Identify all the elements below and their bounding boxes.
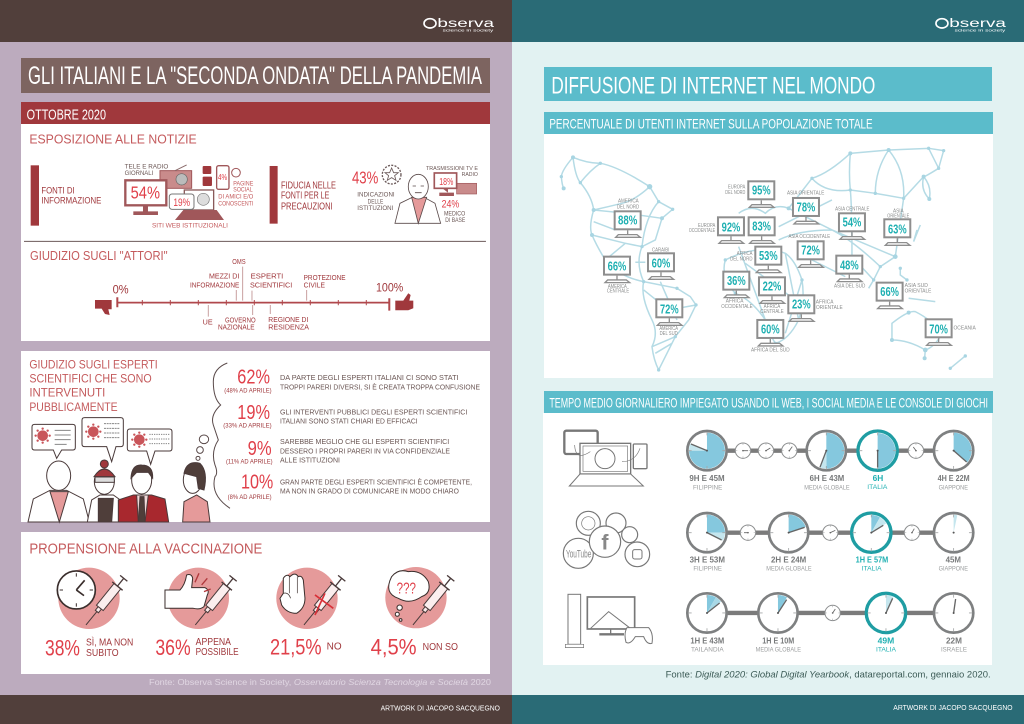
map region labels: AMERICA bbox=[618, 199, 639, 205]
marker bar 1 bbox=[31, 165, 39, 226]
labels: tele radio: TELE E RADIO bbox=[125, 163, 168, 170]
actor labels: CIVILE bbox=[304, 280, 325, 289]
marker bar 2 bbox=[270, 166, 278, 224]
small clocks bbox=[735, 443, 924, 458]
labels row 3: 1H E 10M bbox=[762, 637, 795, 646]
clock: 4h22 giappone bbox=[934, 431, 973, 470]
section: time panel bbox=[549, 395, 1013, 712]
timeline row 1 bbox=[687, 431, 973, 470]
labels row 2: MEDIA GLOBALE bbox=[766, 566, 812, 573]
icon: game console bbox=[565, 594, 652, 648]
heading: esposizione: ESPOSIZIONE ALLE NOTIZIE bbox=[29, 131, 197, 146]
stat: 9%: (11% AD APRILE) bbox=[226, 458, 273, 465]
world map network bbox=[561, 148, 965, 370]
map region labels: ORIENTALE bbox=[816, 305, 843, 311]
map region labels: CENTRALE bbox=[760, 309, 784, 315]
stat: 10%: 10% bbox=[241, 470, 273, 493]
map region labels bbox=[607, 185, 976, 353]
monitor: africa orientale: 23% bbox=[792, 298, 811, 312]
icon: tv 18% bbox=[434, 173, 477, 196]
stat: 4,5%: 4,5% bbox=[371, 634, 417, 659]
labels row 3: 49M bbox=[878, 637, 895, 646]
actor labels bbox=[190, 257, 346, 331]
labels: tele radio: GIORNALI bbox=[125, 170, 153, 177]
actor labels: SCIENTIFICI bbox=[250, 280, 292, 289]
label: istituzioni: DELLE bbox=[368, 198, 383, 205]
section: lower left panels bbox=[28, 357, 500, 712]
heading: esperti: SCIENTIFICI CHE SONO bbox=[29, 372, 152, 386]
labels: pagine social: SOCIAL bbox=[233, 187, 253, 194]
actor labels: MEZZI DI bbox=[209, 272, 239, 281]
stat: 10%: MA NON IN GRADO DI COMUNICARE IN MODO CHIARO bbox=[280, 486, 459, 495]
map region labels: ASIA bbox=[893, 208, 904, 214]
label: fiducia: FIDUCIA NELLE bbox=[281, 180, 336, 191]
labels row 2: ITALIA bbox=[862, 566, 882, 573]
stat: 10% bbox=[228, 470, 472, 501]
heading: esperti: PUBBLICAMENTE bbox=[29, 400, 118, 414]
header bar left bbox=[0, 0, 512, 42]
label: siti web: SITI WEB ISTITUZIONALI bbox=[152, 222, 228, 229]
monitor: caraibi bbox=[648, 253, 674, 279]
labels row 3: ITALIA bbox=[876, 647, 897, 654]
monitor: asia centrale: 54% bbox=[843, 216, 861, 230]
footer bar left bbox=[0, 695, 512, 724]
credit right: ARTWORK DI JACOPO SACQUEGNO bbox=[893, 703, 1013, 712]
monitor: asia centrale bbox=[839, 213, 865, 239]
timeline row 3 bbox=[687, 593, 973, 633]
icon: social media bbox=[563, 511, 650, 568]
icon: phone 4% bbox=[217, 166, 240, 189]
speech bubble 3 bbox=[127, 429, 172, 464]
small clocks bbox=[740, 525, 920, 540]
stat 43%: 43% bbox=[352, 167, 378, 187]
actor labels: OMS bbox=[232, 257, 246, 266]
actor labels: INFORMAZIONE bbox=[190, 280, 239, 289]
map region labels: OCEANIA bbox=[953, 326, 976, 332]
panel: news exposure bbox=[21, 124, 490, 341]
icon: emblem bbox=[382, 165, 401, 184]
thought bubbles bbox=[196, 435, 209, 460]
icon: laptop 19% bbox=[169, 190, 224, 220]
stat: 36% bbox=[155, 635, 239, 660]
stat: 9%: ALLE ISTITUZIONI bbox=[280, 455, 340, 464]
logo right: science in society bbox=[955, 28, 1006, 32]
label: medico: DI BASE bbox=[445, 217, 465, 224]
icon: radio bbox=[160, 165, 192, 188]
label: medico bbox=[444, 210, 465, 224]
map region labels: CENTRALE bbox=[607, 289, 629, 295]
clock: 1h10 media globale bbox=[758, 593, 798, 633]
small clock bbox=[825, 605, 840, 621]
labels row 1: GIAPPONE bbox=[939, 484, 968, 491]
panel: right background bbox=[512, 0, 1024, 724]
person: doctor bbox=[28, 461, 89, 522]
stat: 4,5% bbox=[371, 634, 458, 659]
timeline row 2 bbox=[687, 513, 973, 552]
monitor: asia orientale: 78% bbox=[797, 200, 815, 214]
map region labels: AFRICA bbox=[764, 304, 780, 310]
actor labels: PROTEZIONE bbox=[304, 273, 346, 282]
footer bar right bbox=[512, 695, 1024, 724]
scale labels: 100% bbox=[376, 281, 404, 295]
map region labels: DEL NORD bbox=[725, 190, 745, 196]
icon: hand syringe bbox=[276, 568, 347, 629]
title right: DIFFUSIONE DI INTERNET NEL MONDO bbox=[551, 72, 875, 99]
map region labels: OCCIDENTALE bbox=[721, 304, 753, 310]
section: upper left panel bbox=[24, 63, 486, 331]
icon: monitor 54% bbox=[125, 180, 166, 215]
stat: 62%: DA PARTE DEGLI ESPERTI ITALIANI CI SONO STATI bbox=[280, 373, 459, 382]
scale labels bbox=[113, 281, 404, 296]
title bar left bbox=[21, 58, 490, 93]
actor labels: GOVERNO bbox=[225, 316, 256, 325]
map region labels: ASIA DEL SUD bbox=[834, 283, 865, 289]
label: fiducia: FONTI PER LE bbox=[281, 191, 330, 202]
panel: vaccination bbox=[21, 532, 490, 674]
clock: 1h57 italia bbox=[852, 513, 891, 552]
monitor: caraibi: 60% bbox=[652, 256, 670, 270]
stat: 10%: GRAN PARTE DEGLI ESPERTI SCIENTIFICI È COMPETENTE, bbox=[280, 477, 472, 486]
map region labels: AMERICA bbox=[608, 284, 627, 290]
heading: ottobre: OTTOBRE 2020 bbox=[27, 107, 106, 123]
monitor: africa nord bbox=[755, 247, 781, 273]
labels row 1: 9H E 45M bbox=[689, 474, 725, 483]
labels row 3 bbox=[690, 637, 967, 654]
monitor: europa occidentale bbox=[718, 217, 744, 243]
label: trasmissioni bbox=[426, 166, 478, 178]
icon: doctor bbox=[395, 174, 441, 223]
labels row 1: MEDIA GLOBALE bbox=[804, 484, 850, 491]
logo right bbox=[936, 16, 1006, 32]
label: istituzioni: ISTITUZIONI bbox=[357, 205, 394, 212]
icon: thumb down bbox=[95, 300, 112, 315]
stat: 21,5%: 21,5% bbox=[270, 634, 322, 659]
scale bbox=[117, 267, 389, 317]
monitor: asia orientale 63 bbox=[884, 219, 910, 245]
map region labels: EUROPA bbox=[698, 223, 715, 229]
monitor: europa nord bbox=[748, 181, 774, 207]
labels row 2: 1H E 57M bbox=[856, 556, 889, 565]
map region labels: DEL NORD bbox=[730, 256, 752, 262]
map region labels: ORIENTALE bbox=[887, 213, 909, 219]
monitor: africa sud: 60% bbox=[761, 322, 780, 336]
clock: 45m giappone bbox=[934, 513, 973, 552]
heading: vaccinazione: PROPENSIONE ALLA VACCINAZIONE bbox=[29, 541, 263, 557]
source left: Fonte: Observa Science in Society, Osservatorio Scienza Tecnologia e Società 2020 bbox=[149, 677, 491, 687]
monitor: africa sud bbox=[757, 320, 783, 346]
ottobre bar bbox=[21, 102, 490, 124]
labels row 1: 4H E 22M bbox=[938, 474, 970, 483]
actor labels: ESPERTI bbox=[251, 272, 283, 281]
stat: 36%: POSSIBILE bbox=[196, 647, 239, 658]
icon: monitor 54%: 54% bbox=[131, 183, 160, 203]
logo left: bserva bbox=[437, 16, 495, 30]
stat: 9%: 9% bbox=[248, 437, 272, 460]
map region labels: ASIA SUD bbox=[905, 283, 928, 289]
stat: 36%: APPENA bbox=[196, 637, 231, 648]
monitor: america centrale: 66% bbox=[608, 260, 626, 274]
map region labels: ASIA OCCIDENTALE bbox=[788, 234, 830, 240]
labels row 3: 1H E 43M bbox=[690, 637, 725, 646]
map region labels: AFRICA bbox=[726, 299, 744, 305]
actor labels: RESIDENZA bbox=[268, 322, 310, 331]
monitor: america centrale bbox=[604, 257, 630, 283]
monitor: africa centrale: 22% bbox=[763, 280, 781, 294]
stat: 38% bbox=[45, 636, 133, 661]
icon: social media: f bbox=[601, 531, 609, 555]
logo left bbox=[424, 16, 495, 32]
title bar right bbox=[544, 67, 992, 101]
label: fiducia: PRECAUZIONI bbox=[281, 201, 333, 212]
labels row 1: ITALIA bbox=[867, 484, 888, 491]
labels row 2 bbox=[690, 556, 968, 573]
label: fonti: FONTI DI bbox=[41, 185, 75, 195]
map region labels: OCCIDENTALE bbox=[689, 228, 715, 234]
monitor: nord america bbox=[615, 211, 641, 237]
speech bubble 2 bbox=[82, 418, 123, 462]
monitor: europa orientale bbox=[749, 217, 775, 243]
stat: 38%: SÌ, MA NON bbox=[86, 636, 133, 649]
icon: devices bbox=[564, 431, 647, 486]
stat 24%: 24% bbox=[442, 199, 459, 211]
monitor: asia sud orientale bbox=[877, 283, 903, 309]
source right: Fonte: Digital 2020: Global Digital Yearbook , datareportal.com, gennaio 2020. bbox=[666, 670, 991, 680]
stat: 62%: 62% bbox=[237, 365, 270, 388]
labels: pagine social: PAGINE bbox=[233, 180, 253, 187]
monitor: asia occidentale bbox=[798, 241, 824, 267]
monitor: asia sud bbox=[836, 256, 862, 282]
person: woman bbox=[87, 460, 125, 522]
clock: 2h24 media globale bbox=[769, 513, 808, 552]
monitor: africa occidentale bbox=[723, 272, 749, 298]
monitor: europa occidentale: 92% bbox=[722, 220, 740, 234]
map region labels: ASIA CENTRALE bbox=[835, 207, 870, 213]
monitor: asia sud orientale: 66% bbox=[880, 285, 899, 299]
labels row 2: 2H E 24M bbox=[771, 556, 807, 565]
stat: 9% bbox=[226, 437, 450, 465]
stat: 19%: 19% bbox=[237, 401, 270, 424]
monitor: asia occidentale: 72% bbox=[801, 244, 820, 258]
subheading bar time bbox=[544, 391, 993, 413]
stat: 4,5%: NON SO bbox=[423, 642, 458, 653]
title: GLI ITALIANI E LA "SECONDA ONDATA" DELLA PANDEMIA bbox=[28, 63, 482, 90]
map region labels: AMERICA bbox=[659, 326, 678, 332]
label: istituzioni bbox=[357, 192, 395, 212]
labels row 1: 6H E 43M bbox=[810, 474, 845, 483]
map region labels: ASIA ORIENTALE bbox=[787, 191, 824, 197]
stat: 62%: TROPPI PARERI DIVERSI, SI È CREATA TROPPA CONFUSIONE bbox=[280, 383, 480, 392]
icon: tv 18%: 18% bbox=[439, 177, 453, 188]
map region labels: AFRICA bbox=[816, 300, 834, 306]
labels row 2: FILIPPINE bbox=[693, 566, 722, 573]
actor labels: REGIONE DI bbox=[268, 315, 308, 324]
clock: 3h53 filippine bbox=[687, 513, 727, 552]
labels row 2: GIAPPONE bbox=[939, 566, 968, 573]
icon: phone 4%: 4% bbox=[218, 173, 227, 182]
icon: doubt syringe: ??? bbox=[397, 580, 416, 597]
clock: 1h43 tailandia bbox=[687, 593, 727, 633]
map region labels: CARAIBI bbox=[652, 247, 670, 253]
labels: pagine social bbox=[218, 180, 253, 207]
map nodes bbox=[560, 147, 967, 372]
map region labels: AFRICA bbox=[737, 251, 753, 257]
icon: clock syringe bbox=[57, 568, 129, 629]
monitor: africa occidentale: 36% bbox=[727, 274, 746, 288]
label: fonti: INFORMAZIONE bbox=[41, 195, 101, 205]
icon: social squares bbox=[203, 166, 212, 186]
stat: 9%: SAREBBE MEGLIO CHE GLI ESPERTI SCIENTIFICI bbox=[280, 437, 449, 446]
label: trasmissioni: TRASMISSIONI TV E bbox=[426, 166, 478, 172]
monitor: africa nord: 53% bbox=[759, 249, 778, 263]
clock: 49m italia bbox=[866, 593, 906, 633]
heading: esperti: INTERVENUTI bbox=[29, 386, 105, 400]
stat: 19%: GLI INTERVENTI PUBBLICI DEGLI ESPERTI SCIENTIFICI bbox=[280, 407, 467, 416]
label: trasmissioni: RADIO bbox=[462, 172, 478, 178]
person: man bbox=[118, 465, 169, 522]
labels: pagine social: DI AMICI E/O bbox=[218, 193, 253, 200]
monitor: africa orientale bbox=[788, 295, 814, 321]
panel: left background bbox=[0, 0, 512, 724]
logo left: science in society bbox=[443, 28, 494, 32]
header bar right bbox=[512, 0, 1024, 42]
labels row 1: 6H bbox=[873, 474, 884, 483]
labels: tele radio bbox=[125, 163, 168, 177]
map region labels: DEL NORD bbox=[617, 205, 639, 211]
actor labels: NAZIONALE bbox=[218, 322, 255, 331]
stat: 62% bbox=[224, 365, 480, 394]
stat: 21,5%: NO bbox=[327, 641, 342, 652]
credit left: ARTWORK DI JACOPO SACQUEGNO bbox=[381, 703, 500, 712]
label: medico: MEDICO bbox=[444, 210, 465, 217]
labels row 1: FILIPPINE bbox=[693, 484, 723, 491]
monitor: nord america: 88% bbox=[618, 214, 637, 228]
person: thinker bbox=[183, 463, 210, 522]
clock: 9h45 filippine bbox=[687, 431, 727, 470]
labels row 2: 3H E 53M bbox=[690, 556, 725, 565]
stat: 19%: (33% AD APRILE) bbox=[223, 423, 272, 430]
stat: 9%: DESSERO I PROPRI PARERI IN VIA CONFIDENZIALE bbox=[280, 447, 450, 456]
monitor: oceania bbox=[926, 319, 952, 345]
stat: 62%: (48% AD APRILE) bbox=[224, 387, 272, 394]
stat: 36%: 36% bbox=[155, 635, 191, 660]
monitor: asia sud: 48% bbox=[840, 259, 859, 273]
icon: laptop 19%: 19% bbox=[173, 197, 190, 209]
stat: 38%: SUBITO bbox=[86, 648, 119, 659]
labels row 3: 22M bbox=[946, 637, 962, 646]
labels row 1 bbox=[689, 474, 970, 491]
stat: 38%: 38% bbox=[45, 636, 80, 661]
scale labels: 0% bbox=[113, 282, 129, 296]
stat: 10%: (8% AD APRILE) bbox=[228, 494, 272, 501]
thought brace bbox=[213, 363, 230, 508]
label: fonti bbox=[41, 185, 101, 205]
heading: giudizio: GIUDIZIO SUGLI "ATTORI" bbox=[30, 248, 168, 263]
labels row 2: 45M bbox=[946, 556, 961, 565]
monitor: sud america bbox=[656, 299, 682, 325]
logo right: bserva bbox=[949, 16, 1006, 30]
panel: experts bbox=[21, 351, 490, 522]
monitor: asia orientale 63: 63% bbox=[888, 222, 907, 236]
labels row 3: MEDIA GLOBALE bbox=[756, 647, 801, 654]
label: fiducia bbox=[281, 180, 336, 212]
map region labels: AFRICA DEL SUD bbox=[751, 347, 790, 353]
clock: 22m israele bbox=[934, 593, 973, 633]
map region labels: EUROPA bbox=[728, 185, 745, 191]
monitor: oceania: 70% bbox=[929, 322, 948, 336]
clock: 6h43 media globale bbox=[807, 431, 846, 470]
monitor: europa nord: 95% bbox=[752, 184, 771, 198]
stat: 19%: ITALIANI SONO STATI CHIARI ED EFFICACI bbox=[280, 416, 418, 425]
monitor: europa orientale: 83% bbox=[752, 220, 771, 234]
subheading bar map bbox=[544, 112, 993, 134]
section: map bbox=[549, 72, 976, 372]
map region labels: ORIENTALE bbox=[905, 288, 931, 294]
heading: percentuale: PERCENTUALE DI UTENTI INTERNET SULLA POPOLAZIONE TOTALE bbox=[549, 115, 873, 131]
map region labels: DEL SUD bbox=[660, 331, 678, 337]
panel: map bbox=[544, 134, 993, 378]
monitor: sud america: 72% bbox=[660, 302, 679, 316]
monitor: africa centrale bbox=[759, 277, 785, 303]
icon: doubt syringe bbox=[385, 567, 456, 629]
labels row 3: ISRAELE bbox=[941, 647, 967, 654]
icon: thumb syringe bbox=[165, 568, 238, 629]
icon: thumb up bbox=[395, 293, 413, 310]
heading: esperti: GIUDIZIO SUGLI ESPERTI bbox=[29, 357, 158, 371]
heading: esperti bbox=[29, 357, 158, 414]
speech bubble 1 bbox=[32, 424, 75, 458]
actor labels: UE bbox=[203, 317, 213, 326]
stat: 19% bbox=[223, 401, 467, 430]
clock: 6h italia bbox=[858, 431, 897, 470]
icon: social media: YouTube bbox=[566, 549, 591, 561]
labels row 3: TAILANDIA bbox=[691, 647, 724, 654]
panel: time bbox=[543, 413, 992, 665]
monitor: asia orientale bbox=[793, 198, 819, 224]
label: istituzioni: INDICAZIONI bbox=[357, 192, 395, 199]
labels: pagine social: CONOSCENTI bbox=[218, 200, 253, 207]
